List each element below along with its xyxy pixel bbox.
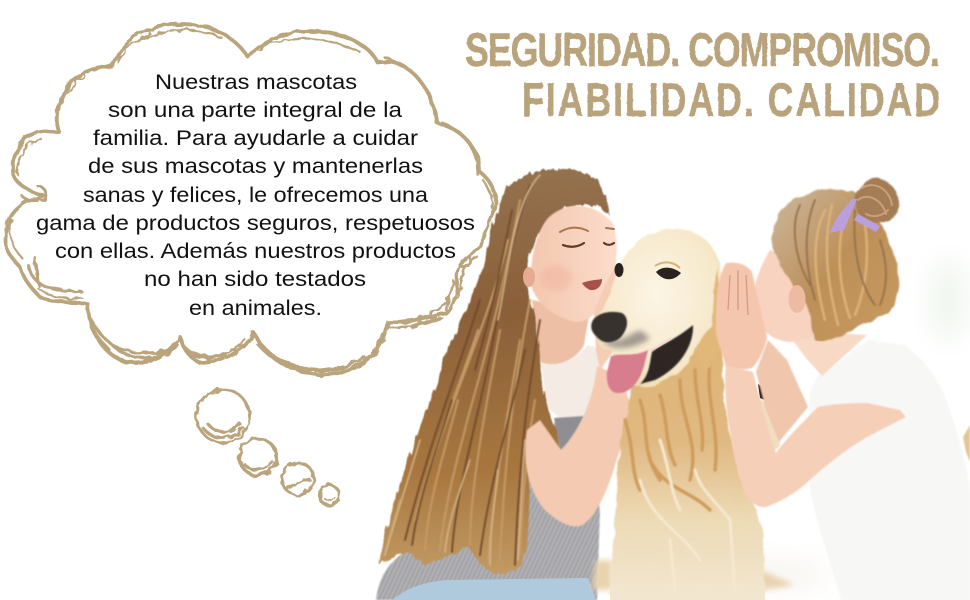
dog chest fur (625, 360, 735, 590)
left girl arm (525, 366, 630, 526)
left girl face (531, 206, 617, 322)
right girl ear (788, 285, 806, 313)
cloud outline: sketch lines (10, 30, 492, 376)
dog collar (758, 384, 779, 405)
line 9: en animales. (189, 297, 322, 320)
left girl eyebrows (560, 228, 614, 232)
thought bubbles (196, 390, 339, 505)
right girl hair strands (795, 200, 886, 325)
left girl white shirt (540, 345, 604, 420)
right girl (716, 179, 970, 600)
right edge fur (963, 425, 970, 462)
left girl hair (378, 169, 610, 574)
thought cloud (6, 24, 497, 376)
soft window background (710, 258, 964, 587)
line 7: con ellas. Además nuestros productos (55, 240, 456, 263)
cloud outline: heavy lower shading (28, 256, 476, 372)
right girl hair bun (855, 179, 899, 223)
left girl hair strands (384, 175, 540, 565)
right girl hands (716, 263, 767, 369)
right girl shirt (809, 340, 970, 600)
heading line 2: FIABILIDAD. CALIDAD (522, 73, 940, 126)
right girl hair (770, 188, 899, 341)
left girl eyes (563, 243, 614, 247)
left girl jeans (393, 578, 596, 600)
cloud outline: small curl (22, 186, 46, 201)
dog mouth (640, 325, 693, 384)
dog eye left (614, 263, 624, 277)
dog (591, 229, 795, 600)
heading (465, 23, 940, 126)
line 1: Nuestras mascotas (155, 71, 357, 94)
line 8: no han sido testados (144, 268, 366, 291)
dog brow (655, 262, 680, 268)
dog body base (610, 585, 765, 600)
line 5: sanas y felices, le ofrecemos una (83, 184, 428, 207)
dog muzzle shadow (602, 330, 650, 348)
line 2: son una parte integral de la (108, 99, 402, 122)
line 3: familia. Para ayudarle a cuidar (93, 127, 418, 150)
dog nose (591, 312, 627, 342)
body text (36, 71, 475, 320)
bubble small (282, 463, 314, 495)
left girl ear (523, 267, 535, 287)
right girl far arm (756, 340, 808, 442)
right girl near arm (725, 365, 906, 507)
cloud outline: main stroke (6, 24, 497, 375)
left girl (376, 169, 630, 600)
right girl neck (785, 330, 867, 376)
left girl hand (594, 265, 622, 370)
left girl grey striped top (376, 418, 600, 600)
right girl face (752, 250, 815, 342)
dog body (610, 340, 764, 596)
right girl finger lines (728, 270, 748, 315)
dog ear (694, 268, 726, 372)
dog shoulder (745, 395, 780, 462)
left girl cheek (540, 265, 572, 291)
left girl neck (532, 300, 590, 364)
dog tongue (607, 350, 648, 393)
dog eye right (656, 268, 681, 279)
dog back fur (592, 560, 795, 590)
bubble medium (240, 438, 276, 476)
bubble tiny (319, 485, 339, 505)
line 6: gama de productos seguros, respetuosos (36, 212, 475, 235)
right girl hair ribbon (829, 199, 880, 233)
line 4: de sus mascotas y mantenerlas (88, 155, 423, 178)
bubble large (196, 390, 250, 442)
right girl bun strands (858, 185, 892, 216)
dog teeth (650, 338, 672, 350)
left girl mouth (582, 279, 602, 290)
photo: girls whispering to a golden retriever (376, 169, 970, 600)
dog head (594, 229, 722, 387)
left girl grey print (554, 416, 585, 450)
heading line 1: SEGURIDAD. COMPROMISO. (465, 23, 940, 76)
